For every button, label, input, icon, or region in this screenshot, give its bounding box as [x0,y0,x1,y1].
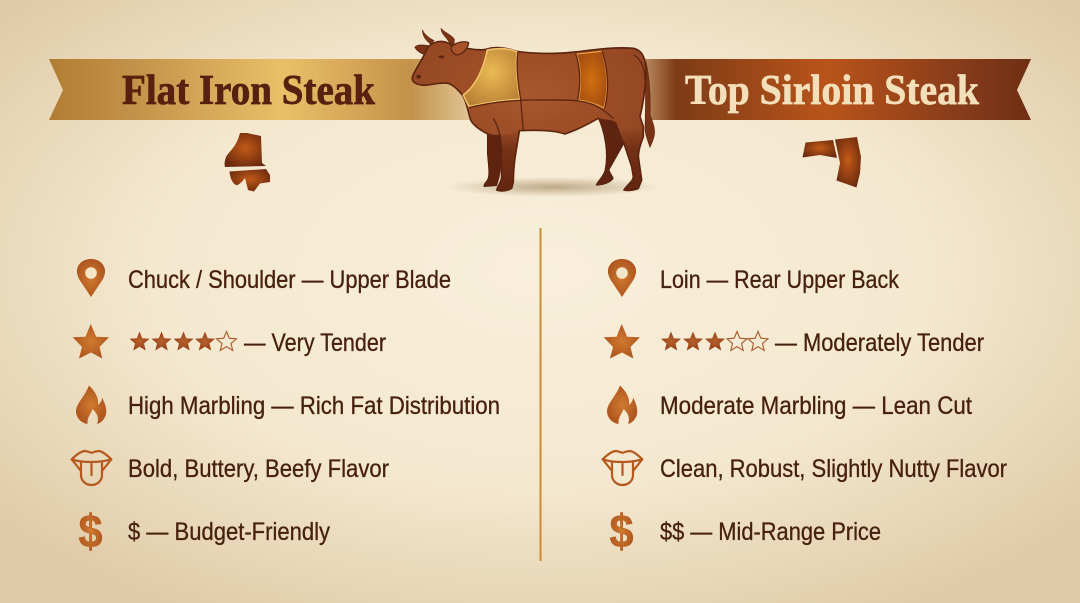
loin highlighted cut [577,51,607,108]
icon: star [604,324,640,358]
price text: $ — Budget-Friendly [128,518,330,546]
price row [78,505,330,557]
near leg shading [497,118,643,191]
icon: dollar: $ [78,505,102,557]
near ear [451,42,469,55]
chuck highlighted cut [463,49,520,107]
location text: Loin — Rear Upper Back [660,266,899,294]
left ribbon banner [49,59,475,120]
tail [644,62,655,147]
flat iron cut icon [225,133,270,192]
marbling row [76,386,500,424]
left column: flat iron details [72,259,500,557]
tenderness row [73,324,386,358]
location text: Chuck / Shoulder — Upper Blade [128,266,451,294]
body outline [412,41,646,191]
tenderness text: — Very Tender [244,329,386,357]
flavor text: Clean, Robust, Slightly Nutty Flavor [660,455,1007,483]
price row [610,505,881,557]
eye and nostril [416,55,445,79]
cut lines [469,51,645,157]
marbling text: High Marbling — Rich Fat Distribution [128,392,500,420]
three of five star rating [661,332,768,350]
icon: map pin [608,259,636,297]
four of five star rating [130,332,236,350]
right ribbon banner [645,59,1031,120]
tenderness text: — Moderately Tender [775,329,984,357]
price text: $$ — Mid-Range Price [660,518,881,546]
marbling text: Moderate Marbling — Lean Cut [660,392,972,420]
far legs [484,118,624,187]
marbling row [607,386,972,424]
top sirloin cut icon [802,137,861,188]
icon: tongue [72,451,111,485]
centre divider [540,228,542,561]
flavor text: Bold, Buttery, Beefy Flavor [128,455,389,483]
flavor row [603,451,1007,485]
icon: star [73,324,109,358]
flavor row [72,451,389,485]
icon: flame [76,386,106,424]
icon: dollar: $ [610,505,634,557]
cow with highlighted cuts [412,28,655,191]
icon: tongue [603,451,642,485]
cow body [412,41,646,191]
right column: top sirloin details [603,259,1007,557]
icon: flame [607,386,637,424]
tenderness row [604,324,984,358]
left ribbon title: Flat Iron Steak [122,68,376,114]
right ribbon title: Top Sirloin Steak [685,68,980,114]
location row [77,259,451,297]
horns [422,28,454,46]
cow ground shadow [445,177,661,197]
rear thigh dark wedge [598,118,624,143]
location row [608,259,899,297]
icon: map pin [77,259,105,297]
far ear [415,45,429,54]
